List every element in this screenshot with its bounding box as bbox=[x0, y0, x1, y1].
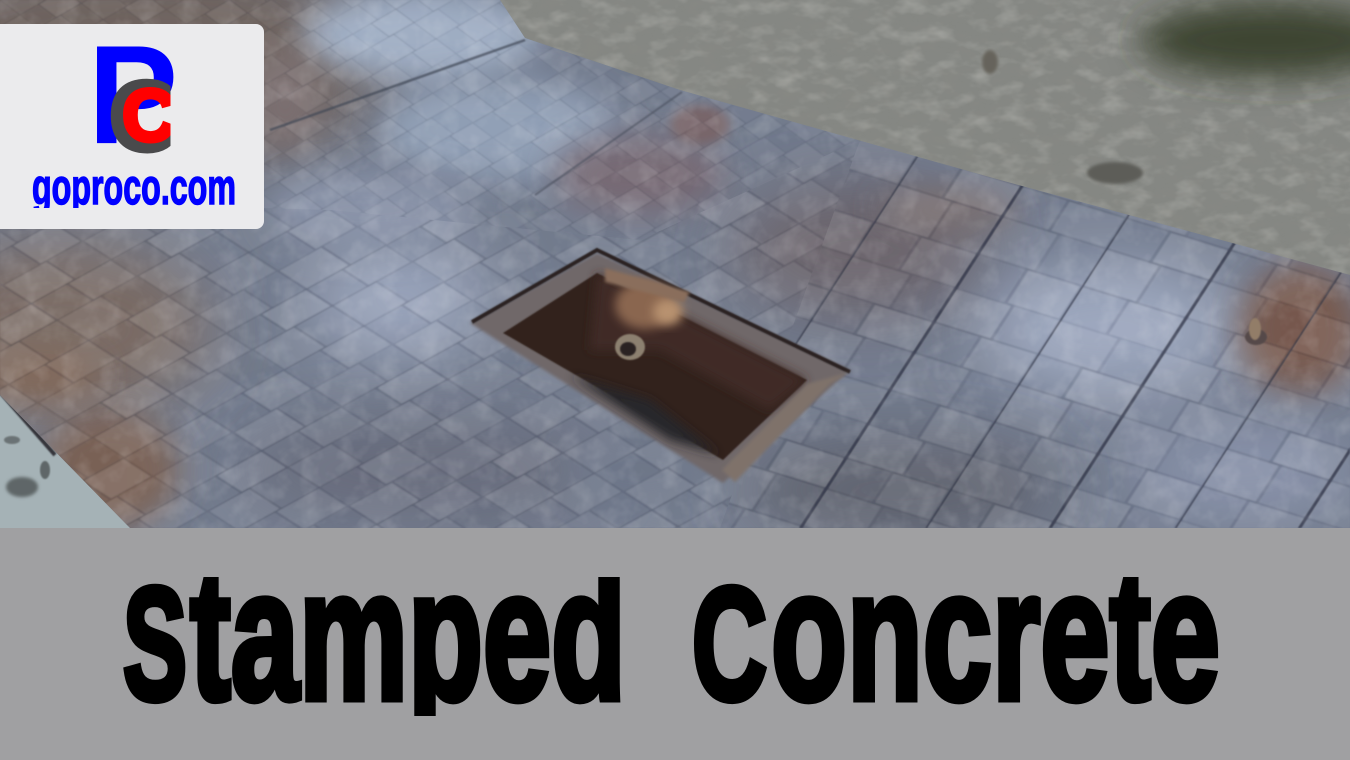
water pipe fitting bbox=[605, 268, 690, 360]
open utility pit bbox=[470, 250, 850, 483]
logo mark: PC monogram: P bbox=[88, 17, 178, 174]
title: S bbox=[123, 554, 187, 733]
title: tamped bbox=[190, 532, 626, 739]
colour variation of the sealer bbox=[0, 0, 1350, 540]
lower-left ground corner bbox=[0, 390, 135, 528]
surface mottling bbox=[0, 0, 1350, 528]
long joint at the top of the walkway bbox=[270, 40, 525, 130]
logo website text: goproco.com bbox=[32, 159, 236, 215]
logo card bbox=[0, 17, 264, 229]
paver joints, right region bbox=[730, 141, 1350, 528]
small debris on the walkway bbox=[1245, 318, 1267, 345]
bare ground behind the walkway bbox=[0, 0, 1350, 528]
photo: stamped concrete walkway bbox=[0, 0, 1350, 540]
paved stamped concrete surface bbox=[0, 0, 1350, 540]
logo mark: PC monogram: C bbox=[122, 74, 175, 157]
paver joints, left and middle region bbox=[0, 152, 854, 528]
logo mark: PC monogram bbox=[97, 46, 174, 154]
title band bbox=[123, 577, 1218, 716]
logo mark: PC monogram: C bbox=[107, 59, 182, 175]
paver joints, upper region bbox=[5, 0, 853, 239]
title bbox=[123, 577, 1218, 716]
title: C bbox=[692, 554, 767, 733]
